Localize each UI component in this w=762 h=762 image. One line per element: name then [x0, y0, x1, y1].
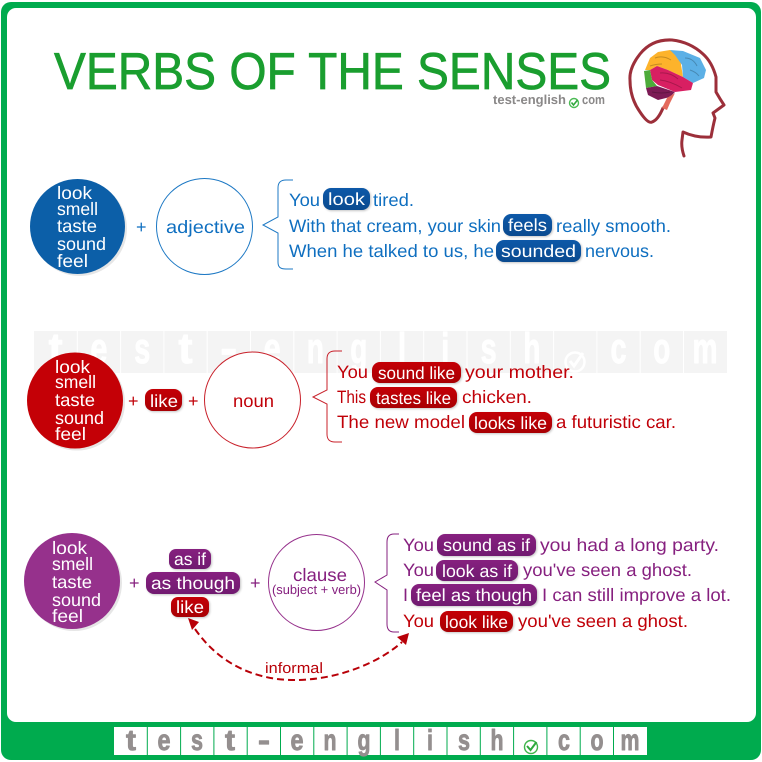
plus: +	[129, 573, 140, 593]
verbs circle purple: feel	[52, 606, 83, 626]
adjective circle	[156, 178, 252, 274]
examples: feels	[508, 215, 547, 235]
examples: sounded	[501, 241, 576, 261]
verbs circle purple: look	[52, 538, 88, 558]
examples: When he talked to us, he	[289, 241, 494, 261]
footer tiles: test-english.com: c	[558, 725, 570, 757]
footer tiles: test-english.com: m	[620, 725, 640, 757]
footer tiles: test-english.com: l	[394, 725, 400, 757]
watermark band: c	[610, 325, 626, 373]
examples: looks like	[474, 413, 547, 433]
pills: as if, as though, like: as though	[151, 573, 235, 593]
watermark band: n	[307, 325, 324, 373]
watermark band	[34, 325, 727, 373]
title: VERBS OF THE SENSES	[54, 43, 611, 101]
examples: you've seen a ghost.	[518, 611, 688, 631]
watermark band: m	[692, 325, 718, 373]
examples: you had a long party.	[540, 535, 719, 555]
examples: chicken.	[462, 387, 532, 407]
pill: like	[145, 389, 182, 411]
examples: look as if	[442, 561, 512, 581]
logo: test-english.com: com	[582, 92, 605, 107]
verbs circle purple: smell	[52, 554, 93, 574]
verbs circle red: feel	[55, 424, 86, 444]
plus: +	[136, 217, 147, 237]
examples: a futuristic car.	[556, 412, 676, 432]
examples: look	[328, 189, 365, 209]
footer tiles: test-english.com: -	[258, 725, 270, 757]
examples: The new model	[337, 412, 465, 432]
examples: feel as though	[416, 585, 532, 605]
examples: look like	[445, 612, 508, 632]
noun circle: noun	[233, 391, 274, 411]
footer tiles: test-english.com: s	[191, 725, 203, 757]
examples: really smooth.	[556, 216, 671, 236]
examples: You	[337, 362, 368, 382]
verbs circle blue	[30, 179, 127, 276]
watermark band: i	[441, 325, 449, 373]
verbs circle red	[27, 352, 125, 450]
watermark band: e	[90, 325, 107, 373]
examples: You	[403, 535, 434, 555]
examples: You	[403, 560, 434, 580]
examples: sound like	[378, 363, 455, 383]
panel: verb + like + noun	[27, 351, 676, 450]
footer tiles: test-english.com: e	[290, 725, 304, 757]
brace blue	[263, 180, 293, 269]
examples: I	[403, 585, 408, 605]
examples	[403, 534, 731, 632]
clause circle: (subject + verb)	[272, 582, 361, 597]
watermark band: l	[398, 325, 406, 373]
arrow: informal link	[188, 618, 409, 680]
plus: +	[188, 391, 199, 411]
footer tiles: test-english.com: o	[590, 725, 604, 757]
pill: like: like	[150, 391, 178, 411]
verbs circle red: look	[55, 357, 91, 377]
watermark band: s	[134, 325, 150, 373]
adjective circle: adjective	[166, 217, 245, 237]
verbs circle blue: taste	[57, 216, 97, 236]
watermark band: s	[481, 325, 497, 373]
examples: sound as if	[443, 535, 530, 555]
footer tiles: test-english.com: h	[490, 725, 504, 757]
brace red	[313, 351, 342, 442]
clause circle: clause	[293, 565, 347, 585]
watermark band: g	[350, 325, 367, 373]
footer tiles: test-english.com: n	[324, 725, 336, 757]
footer tiles: test-english.com: g	[358, 725, 370, 757]
examples: your mother.	[465, 362, 574, 382]
label: informal: informal	[265, 660, 323, 677]
noun circle	[204, 352, 300, 448]
verbs circle purple: sound	[52, 590, 101, 610]
footer tiles: test-english.com	[114, 725, 647, 757]
pills: as if, as though, like: as if	[174, 549, 206, 569]
footer tiles: test-english.com: i	[427, 725, 433, 757]
verbs circle red: taste	[55, 390, 95, 410]
examples: nervous.	[585, 241, 654, 261]
logo: test-english.com: test-english	[493, 92, 566, 107]
logo: test-english.com	[493, 92, 605, 108]
examples: You	[403, 611, 434, 631]
footer tiles: test-english.com: e	[158, 725, 170, 757]
verbs circle purple	[24, 533, 122, 631]
watermark band: -	[220, 325, 237, 373]
verbs circle red: sound	[55, 408, 104, 428]
examples: With that cream, your skin	[289, 216, 501, 236]
verbs circle blue: look	[57, 183, 93, 203]
verbs circle blue: feel	[57, 251, 88, 271]
panel: verb + as if + clause	[24, 533, 731, 680]
verbs circle blue: smell	[57, 199, 98, 219]
pills: as if, as though, like: like	[176, 597, 204, 617]
examples: This	[337, 387, 366, 407]
watermark band: h	[523, 325, 540, 373]
verbs circle blue: sound	[57, 234, 106, 254]
plus: +	[250, 573, 261, 593]
examples	[289, 188, 671, 262]
watermark band: o	[653, 325, 670, 373]
brace purple	[375, 534, 399, 632]
pills: as if, as though, like	[146, 549, 240, 617]
clause circle	[268, 534, 364, 630]
watermark band: e	[264, 325, 281, 373]
icon: head with brain	[630, 40, 724, 156]
examples: I can still improve a lot.	[542, 585, 731, 605]
verbs circle purple: taste	[52, 572, 92, 592]
examples: You	[289, 190, 320, 210]
panel: verb + adjective	[30, 178, 671, 276]
plus: +	[128, 391, 139, 411]
watermark band: t	[49, 325, 63, 373]
verbs circle red: smell	[55, 372, 96, 392]
footer tiles: test-english.com: t	[126, 725, 136, 757]
watermark band: t	[178, 325, 192, 373]
examples: tastes like	[376, 388, 451, 408]
footer tiles: test-english.com: s	[458, 725, 470, 757]
examples: tired.	[373, 190, 414, 210]
examples: you've seen a ghost.	[523, 560, 692, 580]
examples	[337, 362, 676, 433]
footer tiles: test-english.com: t	[225, 725, 235, 757]
